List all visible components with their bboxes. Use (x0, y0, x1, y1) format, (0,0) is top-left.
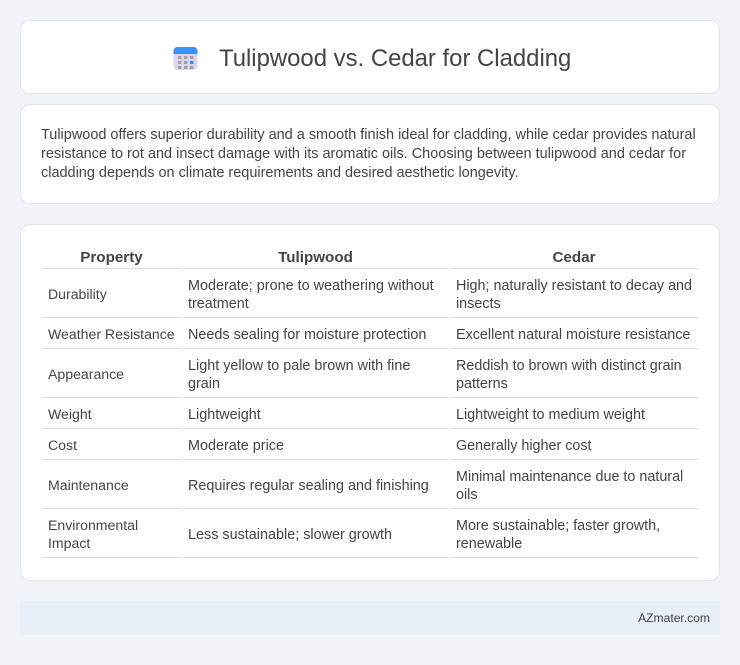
table rows: Lightweight to medium weight (456, 407, 645, 423)
table rows: Appearance (48, 366, 124, 382)
intro text: Tulipwood offers superior durability and a smooth finish ideal for cladding, while cedar provides natural (41, 127, 696, 143)
footer text: AZmater.com (638, 611, 710, 625)
table rows: Weather Resistance (48, 326, 175, 342)
table header: Property (80, 249, 143, 266)
table rows: insects (456, 296, 501, 312)
table header (80, 249, 596, 266)
table rows: Lightweight (188, 407, 261, 423)
intro text: cladding depends on climate requirements and desired aesthetic longevity. (41, 165, 518, 181)
table rows: grain (188, 376, 220, 392)
table rows: Generally higher cost (456, 438, 592, 454)
panel: introduction (20, 104, 720, 204)
table rows: Environmental (48, 517, 138, 533)
table rows: Less sustainable; slower growth (188, 527, 392, 543)
table rows: Maintenance (48, 477, 129, 493)
table rows: Minimal maintenance due to natural (456, 469, 683, 485)
table rows: High; naturally resistant to decay and (456, 278, 692, 294)
table rows: Durability (48, 286, 107, 302)
footer bar (20, 601, 720, 635)
table rows: treatment (188, 296, 249, 312)
table rows: Requires regular sealing and finishing (188, 478, 429, 494)
table rows: Weight (48, 406, 92, 422)
table rows: Needs sealing for moisture protection (188, 327, 426, 343)
table rows: Reddish to brown with distinct grain (456, 358, 682, 374)
panel: title card (20, 20, 720, 94)
table rows (42, 268, 698, 558)
table rows: More sustainable; faster growth, (456, 518, 660, 534)
table rows: Moderate price (188, 438, 284, 454)
table rows: Impact (48, 535, 90, 551)
title: Tulipwood vs. Cedar for Cladding (219, 45, 571, 72)
table rows: Moderate; prone to weathering without (188, 278, 434, 294)
table rows: Light yellow to pale brown with fine (188, 358, 410, 374)
intro text: resistance to rot and insect damage with its aromatic oils. Choosing between tulipwood and cedar for (41, 146, 686, 162)
table rows: Cost (48, 437, 77, 453)
table rows: Excellent natural moisture resistance (456, 327, 690, 343)
table rows: renewable (456, 536, 522, 552)
icon: calendar (174, 47, 198, 70)
table header: Tulipwood (278, 249, 353, 266)
panel: comparison table (20, 224, 720, 581)
table header: Cedar (552, 249, 596, 266)
table rows: patterns (456, 376, 508, 392)
intro text (41, 127, 696, 181)
table rows: oils (456, 487, 478, 503)
